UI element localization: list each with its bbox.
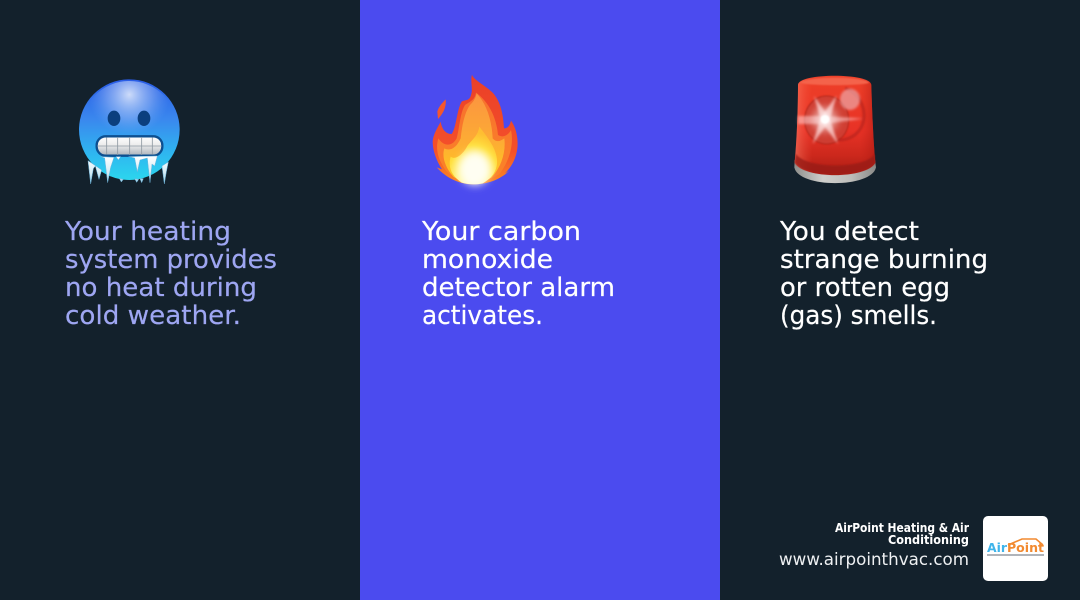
panel: middle blue background: [360, 0, 720, 600]
text: no heat warning: [64, 217, 277, 331]
icon: freezing face emoji: [79, 79, 180, 184]
text: company name and website: [779, 521, 969, 570]
text: smell warning: or rotten egg: [780, 273, 950, 303]
text: carbon monoxide warning: detector alarm: [422, 273, 615, 303]
text: company name and website: AirPoint Heating & Air: [835, 521, 969, 535]
text: smell warning: [779, 217, 988, 331]
logo: AirPoint badge: Point: [1007, 541, 1044, 555]
text: no heat warning: cold weather.: [65, 301, 241, 331]
text: carbon monoxide warning: Your carbon: [421, 217, 581, 247]
text: no heat warning: Your heating: [64, 217, 231, 247]
panel: left dark background: [0, 0, 360, 600]
text: no heat warning: no heat during: [65, 273, 257, 303]
text: company name and website: Conditioning: [888, 533, 969, 547]
text: smell warning: You detect: [779, 217, 919, 247]
text: no heat warning: system provides: [65, 245, 277, 275]
text: carbon monoxide warning: [421, 217, 615, 331]
panel: right dark background: [720, 0, 1080, 600]
logo: AirPoint badge: [983, 516, 1048, 581]
logo: AirPoint badge: Air: [987, 541, 1007, 555]
text: carbon monoxide warning: activates.: [422, 301, 543, 331]
icon: fire emoji: [433, 75, 518, 185]
text: smell warning: (gas) smells.: [780, 301, 937, 331]
text: company name and website: www.airpointhvac.com: [779, 550, 969, 570]
text: smell warning: strange burning: [780, 245, 988, 275]
text: carbon monoxide warning: monoxide: [422, 245, 553, 275]
icon: red rotating alarm light emoji: [794, 76, 876, 183]
